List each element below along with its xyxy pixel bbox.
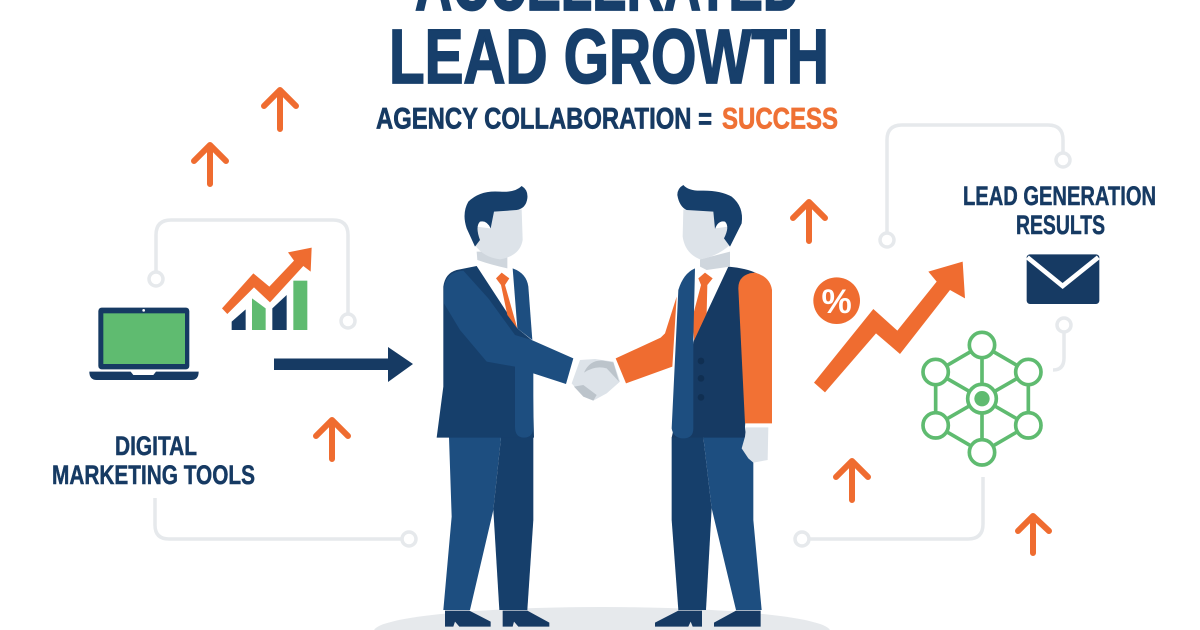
left man tie: [496, 273, 517, 328]
left man hair: [465, 186, 527, 247]
icon: envelope: [1027, 254, 1099, 304]
icon: percent badge: [813, 277, 860, 324]
arrow: orange rising trend: [814, 262, 965, 392]
left man legs: [443, 437, 549, 627]
title: [389, 0, 829, 100]
connector lines: [149, 125, 1071, 546]
right man hair: [677, 185, 742, 247]
handshake: [572, 359, 620, 401]
left man neck: [477, 252, 507, 268]
right man vest: [672, 267, 757, 438]
arrow: navy pointing to handshake: [274, 347, 413, 382]
icon: laptop: [89, 308, 199, 380]
right man face: [683, 209, 730, 259]
subtitle: SUCCESS: [722, 102, 838, 136]
right man hand: [742, 427, 768, 463]
label: digital marketing tools: MARKETING TOOLS: [52, 460, 255, 490]
left man jacket: [437, 266, 573, 438]
icon: growth bar chart: [222, 248, 312, 330]
right man orange sleeve: [738, 273, 772, 423]
label: digital marketing tools: [52, 431, 255, 490]
title: LEAD GROWTH: [389, 14, 829, 100]
label: lead generation results: [963, 181, 1156, 240]
orange up arrows: [194, 90, 1049, 553]
right man legs: [655, 437, 762, 627]
right man extended orange forearm: [616, 297, 677, 383]
ground shadow: [374, 607, 830, 630]
right man neck: [700, 252, 730, 270]
left businessman: [437, 186, 573, 627]
right man tie: [693, 273, 713, 341]
label: digital marketing tools: DIGITAL: [115, 431, 197, 461]
subtitle: AGENCY COLLABORATION =: [376, 102, 712, 136]
right businessman: [616, 185, 772, 627]
vest buttons: [698, 358, 704, 401]
left man face: [475, 209, 523, 259]
right man lapel: [672, 268, 695, 438]
icon: green network: [923, 332, 1041, 465]
label: lead generation results: RESULTS: [1016, 210, 1105, 240]
icon: percent badge: %: [822, 283, 852, 321]
